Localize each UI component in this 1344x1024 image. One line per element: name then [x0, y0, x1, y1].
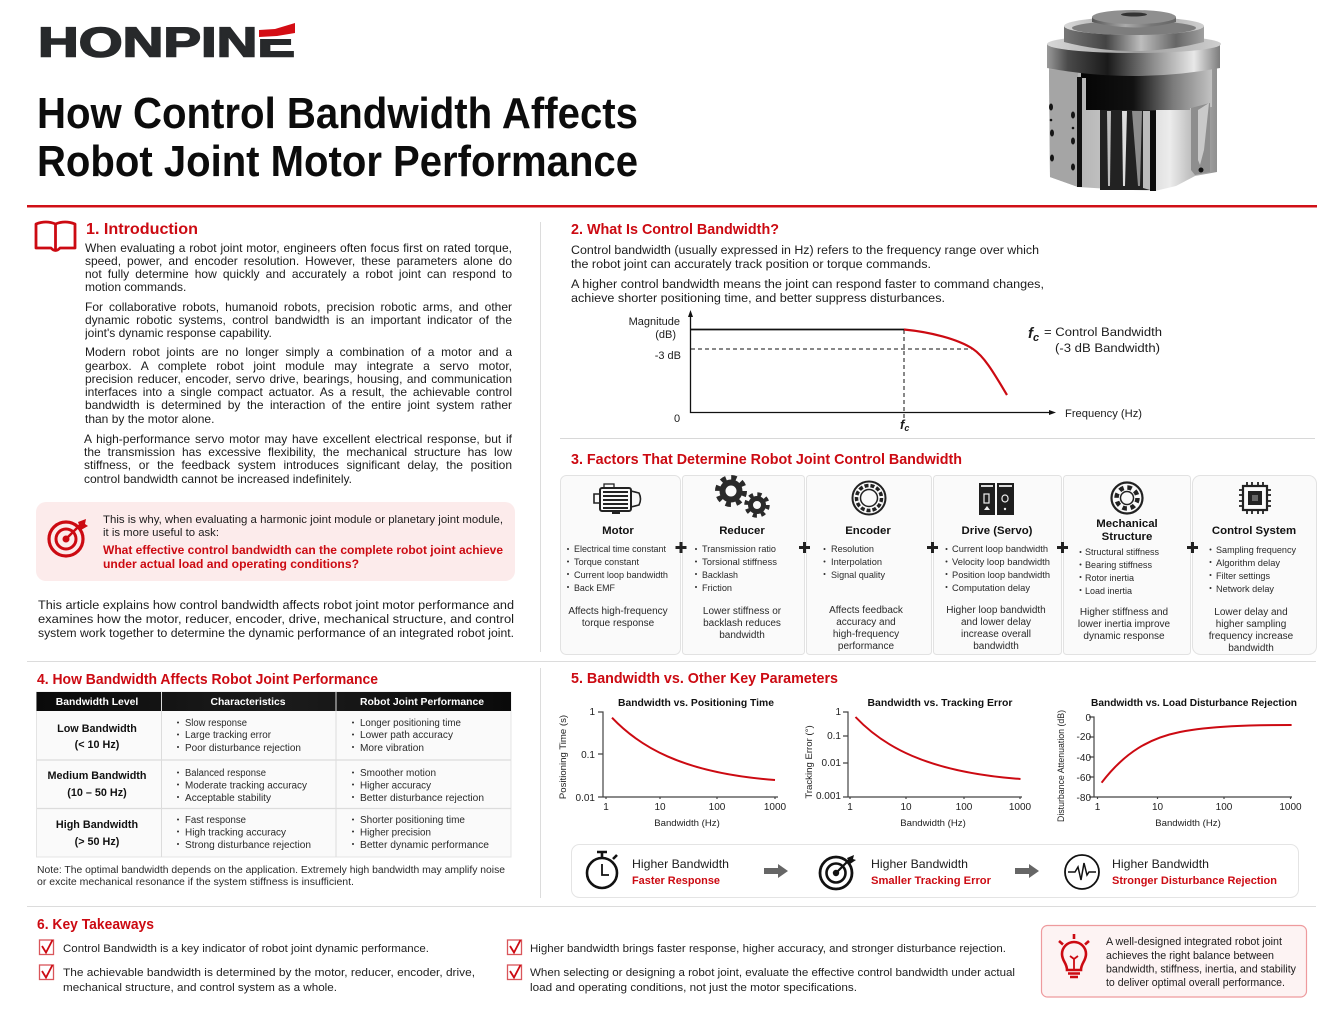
chart: load disturbance rejection: 1000 [1279, 802, 1302, 813]
chart: tracking error: 1 [847, 802, 853, 813]
heading: Factors: 3. Factors That Determine Robot Joint Control Bandwidth [571, 451, 962, 468]
text block: definition: A higher control bandwidth means the joint can respond faster to command changes, [571, 277, 1044, 291]
legend: fc definition: f [1028, 325, 1033, 342]
text block: introduction paragraphs: For collaborative robots, humanoid robots, precision robotic arms, and other [85, 300, 512, 314]
heading: How Bandwidth Affects: 4. How Bandwidth Affects Robot Joint Performance [37, 671, 378, 688]
card: Mechanical Structure: dynamic response [1083, 631, 1165, 642]
text block: introduction paragraphs [84, 241, 514, 493]
card: Reducer: Reducer [719, 525, 765, 537]
arrow [1015, 864, 1039, 878]
card: Mechanical Structure: Bearing stiffness [1085, 560, 1152, 570]
chart: tracking error: 0.1 [827, 731, 841, 742]
flow strip: bandwidth benefits [572, 844, 1298, 898]
icon: target [49, 519, 88, 556]
chart: load disturbance rejection: -80 [1077, 793, 1091, 804]
card: Reducer: backlash reduces [703, 618, 781, 629]
chart: magnitude vs frequency: Magnitude [629, 316, 680, 328]
chart: load disturbance rejection: 0 [1085, 713, 1091, 724]
icon: target [820, 855, 856, 889]
card: Drive (Servo): bandwidth [973, 641, 1019, 652]
chart: positioning time: 100 [709, 802, 726, 813]
icon: servo drives [979, 483, 1014, 515]
callout text: What effective control bandwidth can the complete robot joint achieve [103, 543, 503, 557]
text block: introduction paragraphs: Modern robot joints are no longer simply a combination of a motor and a [85, 345, 512, 359]
takeaway: evaluate under load: load and operating conditions, not just the motor specifications. [530, 982, 857, 994]
icon: bearing [1112, 482, 1142, 514]
table: bandwidth levels: High tracking accuracy [185, 828, 286, 838]
title: How Control Bandwidth Affects [37, 89, 638, 138]
callout text: bandwidth, stiffness, inertia, and stability [1106, 964, 1297, 976]
card: Encoder: Resolution [831, 544, 874, 554]
table: bandwidth levels: Higher accuracy [360, 780, 431, 792]
benefit: stronger disturbance rejection: Stronger Disturbance Rejection [1112, 875, 1277, 887]
table: bandwidth levels: (10 – 50 Hz) [67, 787, 127, 799]
card: Encoder: accuracy and [836, 617, 896, 628]
legend: fc definition: (-3 dB Bandwidth) [1055, 341, 1160, 355]
text block: introduction paragraphs: joint's dynamic response capability. [85, 326, 272, 340]
text block: introduction paragraphs: the transmission has excessive flexibility, the mechanical structure has low [84, 445, 512, 459]
card: Drive (Servo): Position loop bandwidth [952, 570, 1050, 580]
chart: tracking error: Bandwidth vs. Tracking Error [868, 698, 1012, 709]
chart: load disturbance rejection: 100 [1216, 802, 1233, 813]
text block: article summary: examines how the motor, reducer, encoder, drive, mechanical structure, and control [38, 612, 514, 626]
card: Encoder: Encoder [845, 525, 891, 537]
panel: 4. How Bandwidth Affects Robot Joint Performance [36, 671, 511, 888]
benefit: faster response: Faster Response [632, 875, 720, 887]
card: Mechanical Structure: Load inertia [1085, 586, 1133, 596]
card: Drive (Servo): Current loop bandwidth [952, 544, 1048, 554]
text block: article summary: This article explains how control bandwidth affects robot joint motor performance and [38, 598, 514, 612]
card: Reducer: bandwidth [719, 630, 765, 641]
text block: definition: the robot joint can accurately track position or torque commands. [571, 257, 931, 271]
panel: 6. Key Takeaways [37, 916, 1306, 997]
panel: 5. Bandwidth vs. Other Key Parameters [558, 670, 1302, 898]
card: Control System: Filter settings [1216, 571, 1270, 581]
table: bandwidth levels: Low Bandwidth [57, 723, 137, 735]
chart: magnitude vs frequency [629, 310, 1162, 433]
card: Control System: Lower delay and [1214, 607, 1288, 618]
callout: key question [36, 502, 515, 581]
text block: definition: achieve shorter positioning time, and better suppress disturbances. [571, 291, 945, 305]
table: bandwidth levels: Longer positioning time [360, 718, 461, 729]
heading: What Is Control Bandwidth: 2. What Is Control Bandwidth? [571, 221, 779, 238]
legend: fc definition: c [1033, 332, 1039, 344]
chart: tracking error: 10 [900, 802, 912, 813]
chart: magnitude vs frequency: f [900, 417, 904, 432]
note: or excite mechanical resonance if the system stiffness is insufficient. [37, 877, 354, 888]
card: Motor [560, 476, 680, 654]
card: Reducer: Torsional stiffness [702, 557, 777, 567]
plus signs between cards [676, 542, 1198, 553]
takeaway: whole system [40, 965, 475, 994]
table: bandwidth levels: Acceptable stability [185, 793, 271, 804]
icon: chip [1239, 482, 1271, 514]
callout text: under actual load and operating conditions? [103, 557, 359, 571]
card: Control System: bandwidth [1228, 643, 1274, 654]
text block: introduction paragraphs: A high-performance servo motor may have excellent electrical response, but if [84, 432, 512, 446]
table: bandwidth levels [36, 692, 511, 857]
benefit: stronger disturbance rejection: Higher Bandwidth [1112, 857, 1209, 871]
panel: 2. What Is Control Bandwidth? [571, 221, 1162, 433]
heading: Bandwidth vs. parameters: 5. Bandwidth vs. Other Key Parameters [571, 670, 838, 687]
card: Mechanical Structure [1064, 476, 1190, 654]
chart: positioning time: 0.01 [576, 793, 595, 804]
table: bandwidth levels: Better disturbance rejection [360, 793, 484, 804]
card: Motor: Current loop bandwidth [574, 570, 668, 580]
panel: 3. Factors [560, 451, 1316, 654]
table: bandwidth levels: Robot Joint Performance [360, 697, 484, 708]
benefit: smaller tracking error [871, 857, 992, 887]
chart: tracking error: 0.01 [822, 758, 841, 769]
chart: positioning time [558, 698, 787, 829]
chart: load disturbance rejection: Bandwidth (Hz) [1155, 818, 1221, 829]
callout: balance [1042, 926, 1306, 997]
chart: magnitude vs frequency: c [904, 423, 909, 433]
chart: magnitude vs frequency: -3 dB [655, 350, 681, 362]
header rule [27, 205, 1317, 208]
card: Reducer [682, 476, 804, 654]
chart: tracking error: Bandwidth (Hz) [900, 818, 966, 829]
takeaway: higher bandwidth: Higher bandwidth brings faster response, higher accuracy, and stronger disturbance rejection. [530, 943, 1006, 955]
card: Drive (Servo): Drive (Servo) [962, 525, 1033, 537]
text block: definition [571, 243, 1044, 305]
table: bandwidth levels: Lower path accuracy [360, 730, 453, 741]
table: bandwidth levels: Medium Bandwidth [48, 770, 146, 782]
chart: tracking error: 1 [835, 707, 841, 718]
card: Mechanical Structure: Mechanical [1096, 518, 1158, 530]
card: Drive (Servo): Higher loop bandwidth [946, 605, 1046, 616]
benefit: faster response [632, 857, 729, 887]
card: Drive (Servo) [934, 476, 1062, 654]
logo: HONPINE: HONPINE [38, 18, 295, 66]
chart: magnitude vs frequency: (dB) [655, 329, 676, 341]
chart: load disturbance rejection: Bandwidth vs. Load Disturbance Rejection [1091, 698, 1297, 709]
text block: introduction paragraphs: not fully determine how quickly and accurately a robot joint can respond to [85, 267, 512, 281]
card: Mechanical Structure: Rotor inertia [1085, 573, 1135, 583]
chart: magnitude vs frequency: 0 [674, 413, 680, 425]
card: Encoder: high-frequency [833, 629, 899, 640]
chart: tracking error [804, 698, 1032, 829]
text block: introduction paragraphs: motion commands. [85, 280, 186, 294]
icon: open book [36, 222, 75, 250]
panel: 1. Introduction [36, 221, 515, 640]
card: Reducer: Lower stiffness or [703, 606, 782, 617]
chart: positioning time: 1 [589, 707, 595, 718]
text block: introduction paragraphs: When evaluating a robot joint motor, engineers often focus first on rated torque, [85, 241, 512, 255]
card: Mechanical Structure: Structure [1102, 531, 1152, 543]
icon: gears [718, 478, 768, 516]
text block: introduction paragraphs: dynamic robotic systems, control bandwidth is an important indicator of the [85, 313, 512, 327]
takeaway: evaluate under load [508, 965, 1015, 994]
table: bandwidth levels: Strong disturbance rejection [185, 840, 311, 851]
card: Encoder [806, 476, 932, 654]
card: Mechanical Structure: Structural stiffness [1085, 547, 1159, 557]
table: bandwidth levels: Balanced response [185, 768, 266, 779]
card: Motor: Affects high-frequency [568, 606, 668, 617]
card: Mechanical Structure: lower inertia improve [1078, 619, 1171, 630]
callout text: achieves the right balance between [1106, 950, 1274, 962]
table: bandwidth levels: Bandwidth Level [56, 697, 138, 708]
text block: definition: Control bandwidth (usually expressed in Hz) refers to the frequency range over which [571, 243, 1039, 257]
callout text: This is why, when evaluating a harmonic joint module or planetary joint module, [103, 514, 503, 526]
table: bandwidth levels: Large tracking error [185, 730, 272, 741]
callout text [103, 514, 503, 571]
table: bandwidth levels: High Bandwidth [56, 819, 138, 831]
table: bandwidth levels: Moderate tracking accuracy [185, 780, 307, 792]
icon: motor [594, 484, 640, 514]
callout text: A well-designed integrated robot joint [1106, 936, 1282, 948]
heading: Key Takeaways: 6. Key Takeaways [37, 916, 154, 933]
chart: tracking error: 0.001 [816, 791, 841, 802]
chart: positioning time: Positioning Time (s) [558, 715, 569, 799]
card: Control System: frequency increase [1209, 631, 1294, 642]
chart: positioning time: 10 [654, 802, 666, 813]
takeaway: key indicator: Control Bandwidth is a key indicator of robot joint dynamic performance. [63, 943, 429, 955]
text block: introduction paragraphs: control bandwidth cannot be increased indefinitely. [84, 472, 352, 486]
chart: load disturbance rejection: 1 [1095, 802, 1101, 813]
title [37, 89, 638, 186]
table: bandwidth levels: Higher precision [360, 828, 431, 838]
table: bandwidth levels: (< 10 Hz) [75, 739, 120, 751]
legend: fc definition [1028, 325, 1162, 355]
card: Drive (Servo): Velocity loop bandwidth [952, 557, 1050, 567]
card: Drive (Servo): Computation delay [952, 583, 1030, 593]
callout text: it is more useful to ask: [103, 527, 219, 539]
card: Drive (Servo): and lower delay [961, 617, 1031, 628]
card: Control System: higher sampling [1216, 619, 1286, 630]
table: bandwidth levels: More vibration [360, 743, 424, 754]
benefit: stronger disturbance rejection [1112, 857, 1277, 887]
text block: introduction paragraphs: interfaces into a single compact actuator. As a result, the achievable control [85, 385, 512, 399]
benefit: smaller tracking error: Smaller Tracking Error [871, 875, 992, 887]
icon: encoder disc [852, 482, 886, 514]
chart: tracking error: Tracking Error (°) [804, 725, 815, 799]
chart: load disturbance rejection: -40 [1077, 753, 1091, 764]
callout text: to deliver optimal overall performance. [1106, 977, 1285, 989]
chart: positioning time: 0.1 [581, 750, 595, 761]
chart: positioning time: Bandwidth (Hz) [654, 818, 720, 829]
table: bandwidth levels: Shorter positioning time [360, 815, 465, 826]
text block: introduction paragraphs: bandwidth is determined by the interaction of the entire joint system rather [85, 398, 512, 412]
card: Control System: Algorithm delay [1216, 558, 1280, 568]
table: bandwidth levels: Poor disturbance rejection [185, 743, 301, 754]
card: Reducer: Backlash [702, 570, 738, 580]
benefit: smaller tracking error: Higher Bandwidth [871, 857, 968, 871]
card: Motor: Electrical time constant [574, 544, 666, 554]
card: Encoder: Affects feedback [829, 605, 904, 616]
card: Encoder: Signal quality [831, 570, 885, 580]
card: Mechanical Structure: Higher stiffness and [1080, 607, 1168, 618]
card: Encoder: Interpolation [831, 557, 882, 567]
chart: tracking error: 1000 [1009, 802, 1032, 813]
card: Motor: Motor [602, 525, 634, 537]
card: Control System: Network delay [1216, 584, 1274, 594]
icon: stopwatch [587, 852, 617, 888]
chart: load disturbance rejection: -60 [1077, 773, 1091, 784]
product image: robot joint motor [1047, 10, 1221, 191]
legend: fc definition: = Control Bandwidth [1044, 325, 1162, 339]
card: Motor: torque response [582, 618, 655, 629]
takeaway: whole system: The achievable bandwidth is determined by the motor, reducer, encoder, drive, [63, 967, 475, 979]
takeaway: evaluate under load: When selecting or designing a robot joint, evaluate the effective control bandwidth under actual [530, 967, 1015, 979]
chart: tracking error: 100 [956, 802, 973, 813]
chart: positioning time: Bandwidth vs. Positioning Time [618, 698, 774, 709]
text block: introduction paragraphs: precision reducer, encoder, servo drive, bearings, housing, and communication [85, 372, 512, 386]
benefit: faster response: Higher Bandwidth [632, 857, 729, 871]
heading: Introduction: 1. Introduction [86, 221, 198, 238]
chart: magnitude vs frequency: Frequency (Hz) [1065, 408, 1142, 420]
card: Control System: Sampling frequency [1216, 545, 1296, 555]
arrow [764, 864, 788, 878]
card: Drive (Servo): increase overall [961, 629, 1031, 640]
text block: introduction paragraphs: than by the motor alone. [85, 412, 214, 426]
table: bandwidth levels: Better dynamic performance [360, 840, 489, 851]
takeaway: whole system: mechanical structure, and control system as a whole. [63, 982, 337, 994]
chart: load disturbance rejection: 10 [1152, 802, 1163, 813]
chart: load disturbance rejection [1056, 698, 1302, 829]
chart: load disturbance rejection: Disturbance Attenuation (dB) [1056, 710, 1067, 822]
table: bandwidth levels: Characteristics [210, 697, 286, 708]
card: Reducer: Transmission ratio [702, 544, 776, 554]
card: Motor: Torque constant [574, 557, 639, 567]
text block: introduction paragraphs: speed, power, and encoder resolution. However, these parameters alone do [85, 254, 512, 268]
callout text [1106, 936, 1297, 989]
card: Encoder: performance [838, 641, 895, 652]
card: Control System: Control System [1212, 525, 1296, 537]
text block: article summary: system work together to determine the dynamic performance of an integrated robot joint. [38, 626, 514, 640]
chart: positioning time: 1 [603, 802, 609, 813]
icon: pulse [1065, 855, 1099, 889]
title: Robot Joint Motor Performance [37, 137, 638, 186]
card: Motor: Back EMF [574, 583, 615, 593]
table: bandwidth levels: Fast response [185, 815, 246, 826]
note: Note: The optimal bandwidth depends on the application. Extremely high bandwidth may amplify noise [37, 865, 506, 876]
chart: positioning time: 1000 [764, 802, 787, 813]
note [37, 865, 506, 888]
text block: introduction paragraphs: gearbox. A complete robot joint module may integrate a servo motor, [85, 359, 512, 373]
table: bandwidth levels: (> 50 Hz) [75, 836, 120, 848]
card: Reducer: Friction [702, 583, 732, 593]
text block: article summary [38, 598, 514, 640]
card: Control System [1192, 476, 1316, 654]
icon: light bulb [1059, 934, 1089, 977]
table: bandwidth levels: Slow response [185, 718, 247, 729]
table: bandwidth levels: Smoother motion [360, 768, 436, 779]
chart: load disturbance rejection: -20 [1077, 732, 1091, 743]
text block: introduction paragraphs: stiffness, or the feedback system introduces significant delay, the position [84, 458, 512, 472]
